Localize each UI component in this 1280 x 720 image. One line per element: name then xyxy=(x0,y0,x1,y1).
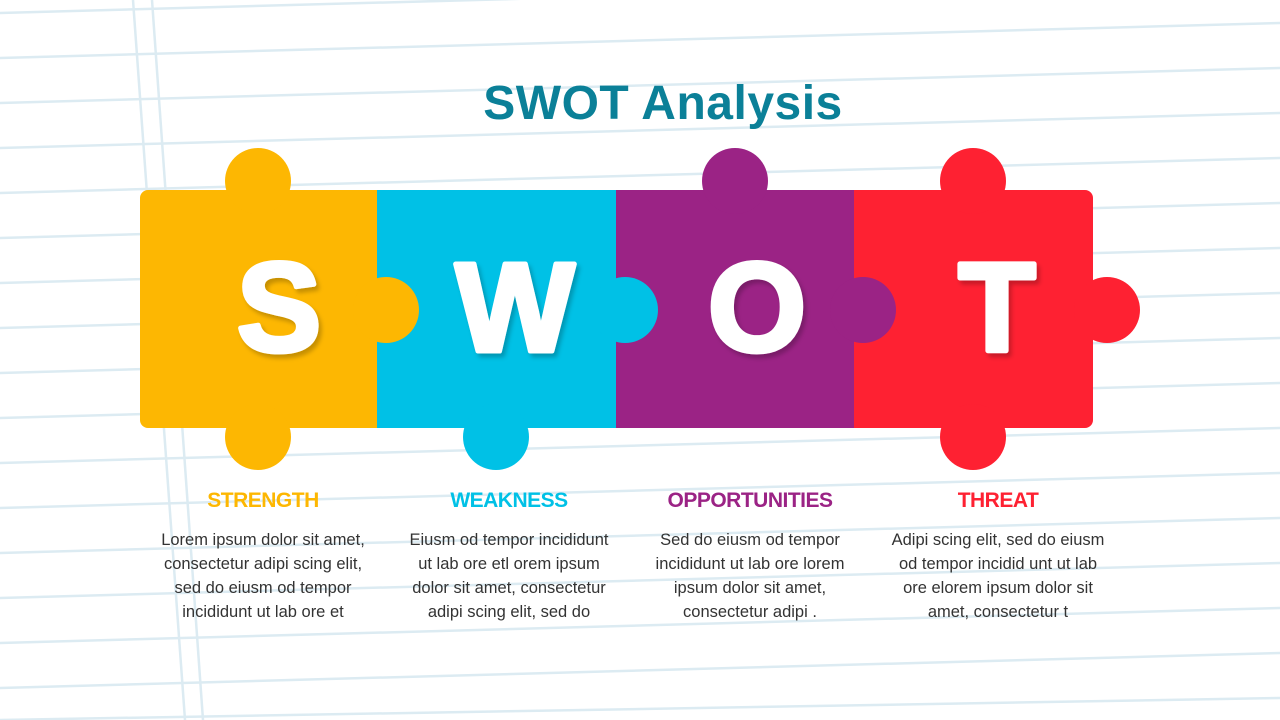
column: weakness: dolor sit amet, consectetur xyxy=(412,579,606,597)
piece: S yellow xyxy=(140,148,419,470)
column: opportunities: Sed do eiusm od tempor xyxy=(660,531,840,549)
column: strength: consectetur adipi scing elit, xyxy=(164,555,362,573)
column: weakness xyxy=(409,489,608,621)
column: strength: STRENGTH xyxy=(207,489,319,512)
column: opportunities: ipsum dolor sit amet, xyxy=(674,579,826,597)
column: strength: Lorem ipsum dolor sit amet, xyxy=(161,531,365,549)
column: strength: incididunt ut lab ore et xyxy=(182,603,344,621)
column: threat: amet, consectetur t xyxy=(928,603,1068,621)
column: opportunities: incididunt ut lab ore lorem xyxy=(656,555,844,573)
piece: O purple xyxy=(592,148,896,428)
column: opportunities xyxy=(656,489,844,621)
column: opportunities: OPPORTUNITIES xyxy=(667,489,833,512)
title: SWOT Analysis xyxy=(483,77,843,130)
column: opportunities: consectetur adipi . xyxy=(683,603,817,621)
column: weakness: Eiusm od tempor incididunt xyxy=(409,531,608,549)
piece: T red: T xyxy=(959,237,1035,378)
column: strength xyxy=(161,489,365,621)
column: weakness: adipi scing elit, sed do xyxy=(428,603,590,621)
column: weakness: WEAKNESS xyxy=(450,489,568,512)
piece: T red xyxy=(830,148,1140,470)
column: threat: Adipi scing elit, sed do eiusm xyxy=(892,531,1104,549)
piece: O purple: O xyxy=(708,237,806,378)
piece: S yellow: S xyxy=(237,237,321,378)
column: threat xyxy=(892,489,1104,621)
column: weakness: ut lab ore etl orem ipsum xyxy=(418,555,600,573)
column: threat: THREAT xyxy=(958,489,1038,512)
column: threat: od tempor incidid unt ut lab xyxy=(899,555,1097,573)
piece: W blue xyxy=(353,190,658,470)
piece: W blue: W xyxy=(456,237,575,378)
column: strength: sed do eiusm od tempor xyxy=(174,579,352,597)
column: threat: ore elorem ipsum dolor sit xyxy=(903,579,1093,597)
